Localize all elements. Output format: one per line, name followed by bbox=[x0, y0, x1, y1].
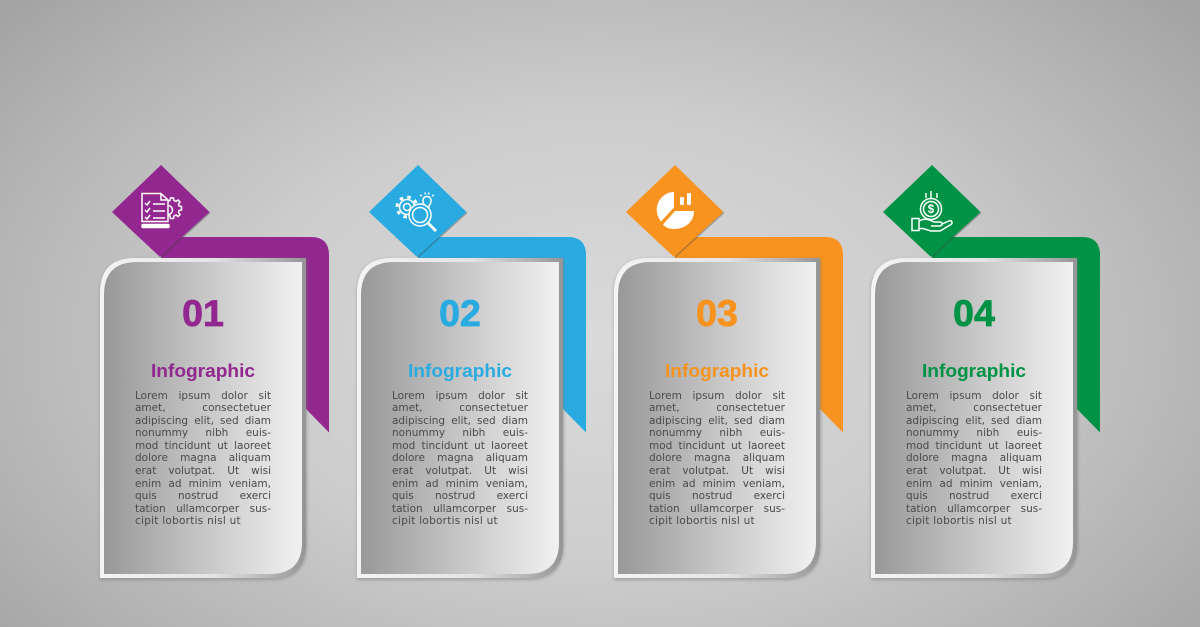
body text: quis nostrud exerci bbox=[392, 490, 528, 502]
panel: step 04 bbox=[870, 165, 1100, 582]
body text: erat volutpat. Ut wisi bbox=[392, 465, 528, 477]
number: 04 bbox=[953, 292, 995, 334]
body text bbox=[392, 390, 528, 527]
ribbon: green bbox=[931, 237, 1100, 432]
body text: Lorem ipsum dolor sit bbox=[906, 390, 1042, 402]
diamond badge bbox=[112, 165, 210, 258]
body text: adipiscing elit, sed diam bbox=[906, 415, 1042, 427]
body text: enim ad minim veniam, bbox=[135, 478, 271, 490]
body text: nonummy nibh euis- bbox=[135, 427, 271, 439]
ribbon: purple bbox=[160, 237, 329, 432]
body text: adipiscing elit, sed diam bbox=[649, 415, 785, 427]
icon: gear, magnifier and bulb bbox=[397, 192, 436, 231]
body text: cipit lobortis nisl ut bbox=[392, 515, 498, 527]
body text: amet, consectetuer bbox=[135, 402, 271, 414]
body text: adipiscing elit, sed diam bbox=[135, 415, 271, 427]
number: 01 bbox=[182, 292, 224, 334]
number: 03 bbox=[696, 292, 738, 334]
body text: mod tincidunt ut laoreet bbox=[392, 440, 528, 452]
card bbox=[614, 258, 821, 580]
body text: quis nostrud exerci bbox=[906, 490, 1042, 502]
body text: cipit lobortis nisl ut bbox=[906, 515, 1012, 527]
body text: nonummy nibh euis- bbox=[392, 427, 528, 439]
body text: mod tincidunt ut laoreet bbox=[906, 440, 1042, 452]
body text: tation ullamcorper sus- bbox=[906, 503, 1042, 515]
ribbon: blue bbox=[417, 237, 586, 432]
body text: enim ad minim veniam, bbox=[649, 478, 785, 490]
body text: tation ullamcorper sus- bbox=[649, 503, 785, 515]
heading: Infographic bbox=[922, 361, 1026, 381]
body text: Lorem ipsum dolor sit bbox=[135, 390, 271, 402]
diamond badge bbox=[626, 165, 724, 258]
panel: step 01 bbox=[99, 165, 329, 581]
body text: tation ullamcorper sus- bbox=[392, 503, 528, 515]
body text: erat volutpat. Ut wisi bbox=[906, 465, 1042, 477]
icon: pie chart and bars bbox=[657, 192, 694, 229]
card bbox=[357, 258, 564, 580]
body text: mod tincidunt ut laoreet bbox=[649, 440, 785, 452]
body text: Lorem ipsum dolor sit bbox=[649, 390, 785, 402]
ribbon: orange bbox=[674, 237, 843, 432]
body text: quis nostrud exerci bbox=[135, 490, 271, 502]
diamond badge bbox=[369, 165, 468, 258]
body text: adipiscing elit, sed diam bbox=[392, 415, 528, 427]
body text: cipit lobortis nisl ut bbox=[649, 515, 755, 527]
body text: dolore magna aliquam bbox=[135, 452, 271, 464]
diamond badge bbox=[883, 165, 982, 258]
body text: quis nostrud exerci bbox=[649, 490, 785, 502]
body text: amet, consectetuer bbox=[392, 402, 528, 414]
body text: nonummy nibh euis- bbox=[906, 427, 1042, 439]
body text bbox=[649, 390, 785, 527]
body text bbox=[906, 390, 1042, 527]
body text: mod tincidunt ut laoreet bbox=[135, 440, 271, 452]
body text: nonummy nibh euis- bbox=[649, 427, 785, 439]
body text: erat volutpat. Ut wisi bbox=[135, 465, 271, 477]
body text: tation ullamcorper sus- bbox=[135, 503, 271, 515]
number: 02 bbox=[439, 292, 481, 334]
icon: checklist and gear bbox=[142, 194, 182, 228]
body text: amet, consectetuer bbox=[649, 402, 785, 414]
heading: Infographic bbox=[151, 361, 255, 381]
body text: dolore magna aliquam bbox=[649, 452, 785, 464]
heading: Infographic bbox=[408, 361, 512, 381]
card bbox=[871, 258, 1078, 580]
heading: Infographic bbox=[665, 361, 769, 381]
body text: amet, consectetuer bbox=[906, 402, 1042, 414]
body text: dolore magna aliquam bbox=[392, 452, 528, 464]
body text: Lorem ipsum dolor sit bbox=[392, 390, 528, 402]
body text: erat volutpat. Ut wisi bbox=[649, 465, 785, 477]
icon: hand holding coin: $ bbox=[928, 204, 935, 216]
panel: step 02 bbox=[356, 165, 586, 582]
body text: enim ad minim veniam, bbox=[392, 478, 528, 490]
body text: enim ad minim veniam, bbox=[906, 478, 1042, 490]
body text: dolore magna aliquam bbox=[906, 452, 1042, 464]
icon: hand holding coin bbox=[912, 191, 952, 231]
card bbox=[100, 258, 307, 580]
body text bbox=[135, 390, 271, 527]
panel: step 03 bbox=[612, 165, 843, 582]
body text: cipit lobortis nisl ut bbox=[135, 515, 241, 527]
